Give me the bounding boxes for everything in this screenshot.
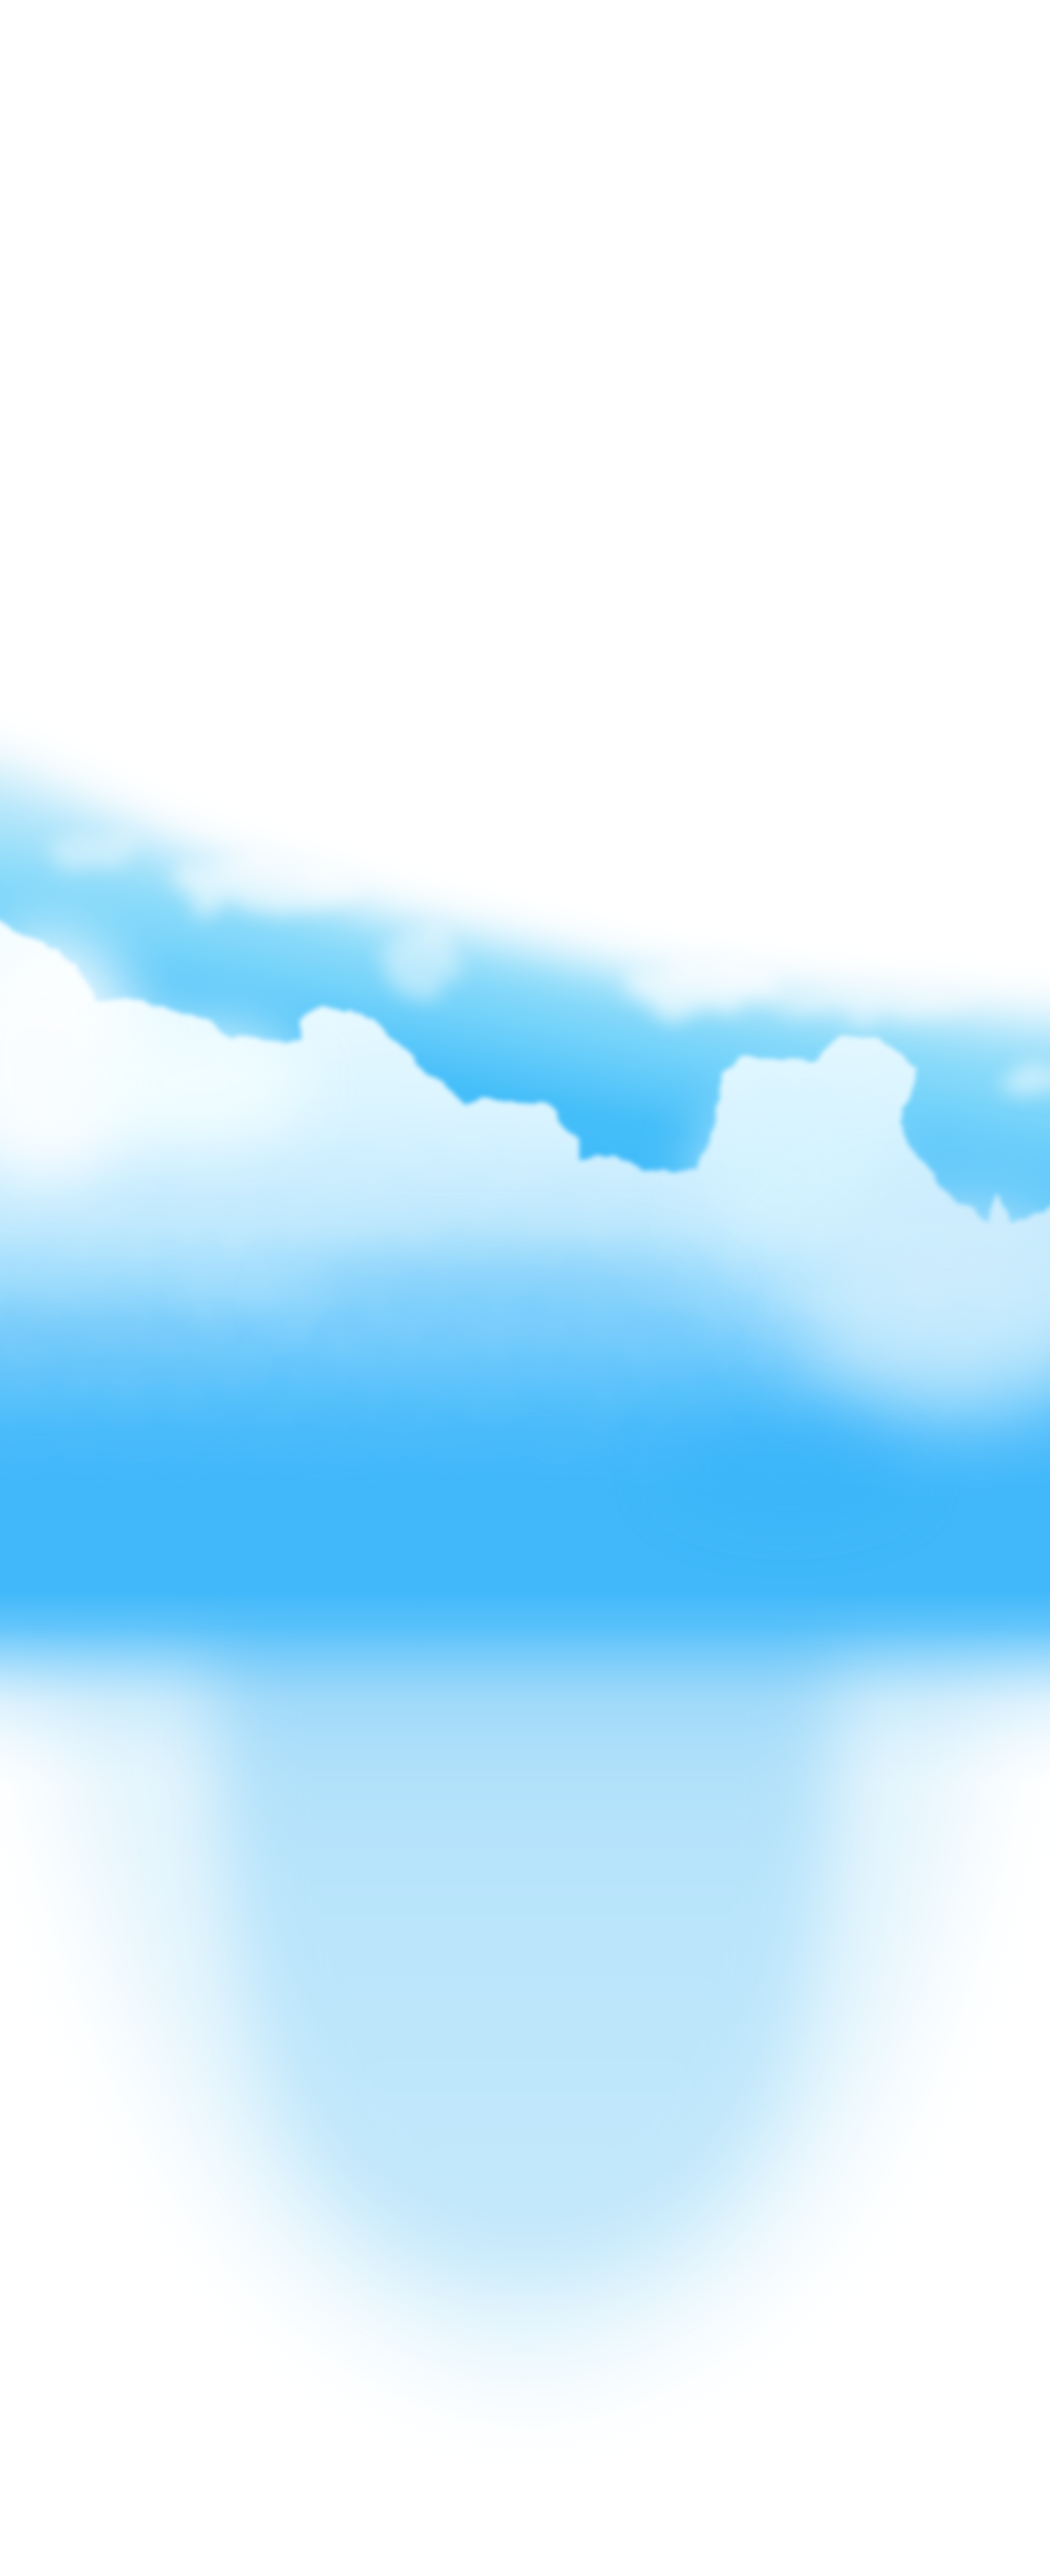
belt top overlap	[0, 1220, 1050, 1417]
upper white cloud bank	[0, 525, 1050, 1017]
lower glow: outer halo	[26, 1608, 998, 2382]
sky band	[0, 656, 1050, 1312]
deep blue belt	[0, 1247, 1050, 1785]
cloud highlights and shading	[0, 932, 1050, 1516]
lower cumulus cloud	[0, 905, 1050, 1503]
lower glow: inner pale blue drop	[210, 1608, 834, 2283]
upper cloud wisps	[43, 829, 1050, 1097]
